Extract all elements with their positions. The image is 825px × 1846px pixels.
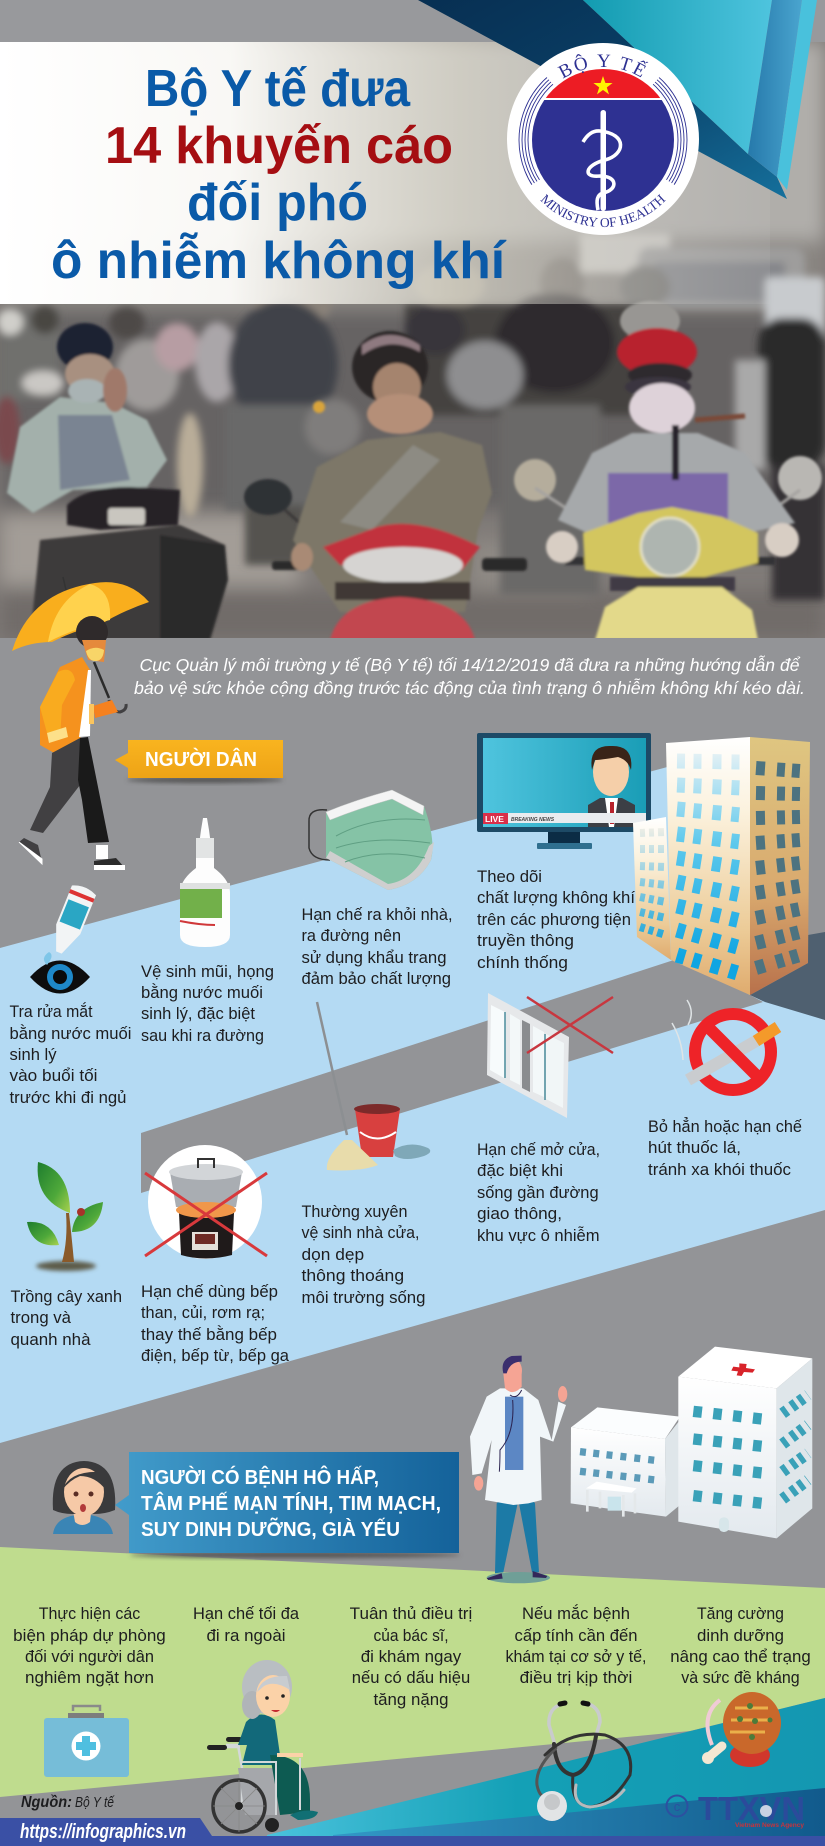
text: people advice items: ra đường nên [302, 927, 401, 945]
text: people advice items: trong và [10, 1309, 72, 1327]
text: people advice items: Hạn chế ra khỏi nhà, [302, 906, 452, 924]
icon: food [702, 1692, 781, 1767]
text: people advice items: sinh lý, đặc biệt [141, 1005, 255, 1023]
background band: grey diagonal [141, 958, 763, 1193]
badge: NGƯỜI DÂN: NGƯỜI DÂN [145, 747, 257, 771]
text: people advice items: sinh lý [10, 1046, 57, 1064]
icon: medical kit [44, 1706, 129, 1777]
header grey strip [0, 0, 825, 42]
logo: TTXVN watermark: Vietnam News Agency [735, 1822, 804, 1829]
text: people advice items: vào buổi tối [10, 1067, 98, 1085]
text: people advice items: dọn dẹp [302, 1246, 364, 1264]
text: people advice items: chính thống [477, 954, 568, 972]
text: people advice items: Trồng cây xanh [10, 1288, 122, 1306]
source note [21, 1794, 115, 1811]
text: people advice items: Hạn chế dùng bếp [141, 1283, 278, 1301]
text: people advice items: Thường xuyên [302, 1203, 408, 1221]
text: risk group advice: đi khám ngay [361, 1648, 462, 1666]
text: risk group advice: điều trị kịp thời [520, 1669, 632, 1687]
text: risk group advice [13, 1604, 811, 1709]
text: risk group advice: Tuân thủ điều trị [350, 1605, 472, 1623]
text: risk group advice: Nếu mắc bệnh [522, 1604, 630, 1623]
icon: saline bottle [180, 818, 230, 947]
text: people advice items [10, 868, 802, 1365]
ribbon: top-right folded shape [418, 0, 817, 199]
title [51, 60, 507, 290]
icon: man with umbrella [12, 577, 149, 870]
text: people advice items: sống gần đường [477, 1184, 599, 1202]
text: risk group advice: nghiêm ngặt hơn [25, 1669, 154, 1687]
icon: TV news: LIVE [485, 814, 504, 824]
title banner fade [0, 42, 770, 304]
title: 14 khuyến cáo [105, 117, 453, 175]
text: people advice items: Tra rửa mắt [10, 1002, 93, 1021]
text: risk group advice: tăng nặng [374, 1691, 448, 1709]
footer url: https://infographics.vn [20, 1821, 186, 1843]
text: risk group advice: cấp tính cần đến [514, 1627, 638, 1645]
text: risk group advice: đối với người dân [25, 1648, 154, 1666]
badge: risk groups: TÂM PHẾ MẠN TÍNH, TIM MẠCH, [141, 1491, 441, 1515]
text: people advice items: quanh nhà [10, 1331, 91, 1349]
text: people advice items: điện, bếp từ, bếp ga [141, 1347, 290, 1365]
text: people advice items: Theo dõi [477, 868, 542, 886]
text: risk group advice: đi ra ngoài [206, 1627, 286, 1645]
icon: window with cross [487, 993, 613, 1118]
badge: risk groups: SUY DINH DƯỠNG, GIÀ YẾU [141, 1517, 400, 1541]
text: people advice items: Bỏ hẳn hoặc hạn chế [648, 1117, 802, 1136]
text: risk group advice: Tăng cường [697, 1605, 784, 1623]
text: people advice items: Vệ sinh mũi, họng [141, 963, 274, 981]
intro text: Cục Quản lý môi trường y tế (Bộ Y tế) tối 14/12/2019 đã đưa ra những hướng dẫn để [140, 655, 801, 675]
source note: Bộ Y tế [75, 1794, 115, 1811]
icon: TV news: BREAKING NEWS [511, 817, 555, 823]
text: people advice items: truyền thông [477, 932, 574, 950]
logo: TTXVN watermark: TTXVN [698, 1790, 805, 1827]
text: people advice items: hút thuốc lá, [648, 1139, 741, 1157]
text: risk group advice: và sức đề kháng [681, 1669, 800, 1687]
icon: stethoscope [537, 1703, 631, 1821]
logo: Ministry of Health: MINISTRY OF HEALTH [540, 194, 666, 228]
title: ô nhiễm không khí [51, 232, 507, 290]
text: people advice items: chất lượng không khí [477, 889, 635, 907]
background band: light blue [0, 750, 825, 1443]
intro text [134, 655, 805, 698]
text: people advice items: than, củi, rơm rạ; [141, 1304, 265, 1322]
source note: Nguồn: [21, 1794, 72, 1811]
text: risk group advice: nếu có dấu hiệu [352, 1669, 470, 1687]
icon: TV news [477, 733, 651, 849]
text: people advice items: tránh xa khói thuốc [648, 1161, 791, 1179]
title: Bộ Y tế đưa [145, 60, 411, 118]
icon: mop and bucket [317, 1002, 430, 1170]
background band: teal [267, 1698, 825, 1836]
footer bar [0, 1818, 825, 1846]
text: people advice items: khu vực ô nhiễm [477, 1226, 600, 1245]
text: risk group advice: Thực hiện các [39, 1605, 140, 1623]
logo: Ministry of Health [507, 43, 699, 235]
intro text: bảo vệ sức khỏe cộng đồng trước tác động của tình trạng ô nhiễm không khí kéo dài. [134, 678, 805, 698]
icon: grandmother in wheelchair [207, 1660, 318, 1832]
logo: Ministry of Health: BỘ Y TẾ [557, 54, 648, 78]
text: people advice items: môi trường sống [302, 1289, 426, 1307]
icon: plant [27, 1162, 103, 1271]
photo: motorbike riders in smog [0, 42, 825, 640]
icon: doctor [470, 1356, 567, 1583]
icon: banned charcoal stove [145, 1145, 267, 1259]
text: risk group advice: nâng cao thể trạng [670, 1648, 811, 1666]
text: risk group advice: Hạn chế tối đa [193, 1605, 300, 1623]
text: people advice items: thay thế bằng bếp [141, 1325, 277, 1344]
text: people advice items: sử dụng khẩu trang [302, 949, 446, 967]
text: people advice items: đảm bảo chất lượng [302, 970, 451, 988]
text: people advice items: trước khi đi ngủ [10, 1089, 127, 1107]
icon: hospital [571, 1347, 812, 1538]
text: people advice items: bằng nước muối [10, 1024, 132, 1043]
text: people advice items: đặc biệt khi [477, 1162, 563, 1180]
icon: apartment buildings [633, 737, 810, 995]
text: people advice items: sau khi ra đường [141, 1027, 264, 1045]
text: people advice items: bằng nước muối [141, 983, 263, 1002]
text: people advice items: Hạn chế mở cửa, [477, 1141, 600, 1159]
text: risk group advice: biện pháp dự phòng [13, 1627, 166, 1645]
icon: eye drops [30, 883, 97, 994]
icon: sick woman [53, 1461, 115, 1534]
text: risk group advice: dinh dưỡng [697, 1627, 784, 1645]
badge: NGƯỜI DÂN [115, 740, 283, 783]
text: people advice items: trên các phương tiện [477, 911, 631, 929]
icon: no smoking [672, 1000, 778, 1090]
background: building shadow [750, 932, 825, 1020]
title: đối phó [187, 174, 368, 232]
background band: dark blue [333, 1788, 825, 1836]
background band: green [0, 1547, 825, 1797]
badge: risk groups: NGƯỜI CÓ BỆNH HÔ HẤP, [141, 1465, 379, 1489]
text: risk group advice: khám tại cơ sở y tế, [506, 1648, 646, 1666]
logo: TTXVN watermark: c [674, 1799, 681, 1814]
text: people advice items: thông thoáng [302, 1267, 404, 1285]
text: people advice items: vệ sinh nhà cửa, [302, 1224, 420, 1242]
text: people advice items: giao thông, [477, 1205, 562, 1223]
text: risk group advice: của bác sĩ, [374, 1627, 448, 1645]
badge: risk groups [115, 1452, 460, 1558]
icon: surgical mask [309, 790, 434, 890]
